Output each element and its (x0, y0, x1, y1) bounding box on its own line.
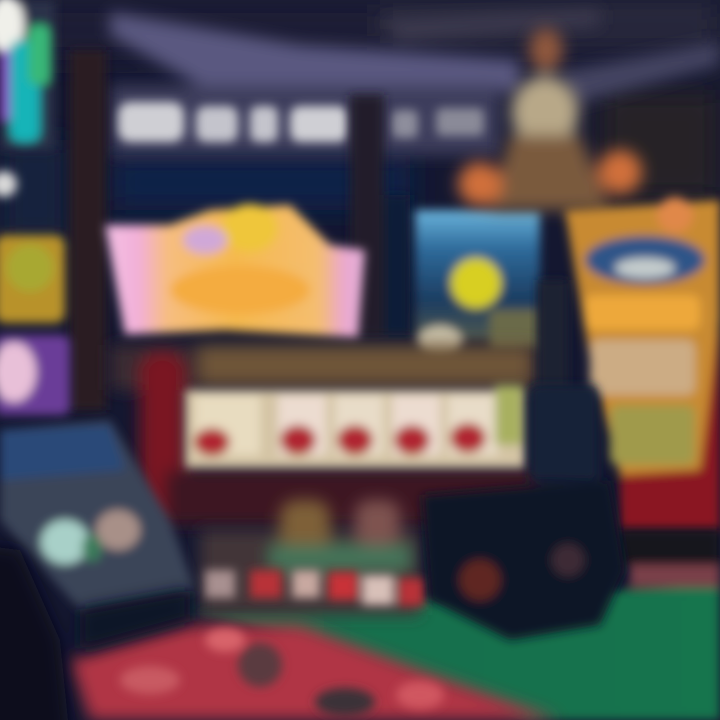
heading glow text (118, 102, 484, 142)
reels panel (185, 385, 525, 468)
ceiling bands (110, 10, 720, 155)
ceiling (0, 0, 720, 240)
pillars (70, 50, 410, 410)
blue screen (415, 210, 540, 358)
left neon panel (0, 0, 55, 197)
dark foreground corner (0, 545, 190, 720)
chip stacks (200, 500, 420, 615)
dark lower machine body (110, 345, 540, 525)
dark cube (422, 385, 625, 640)
main sign (105, 204, 365, 338)
roulette table (70, 625, 560, 720)
right machine (565, 197, 720, 530)
left console (0, 420, 195, 610)
felt table (190, 530, 720, 720)
dark post (538, 280, 568, 390)
statue and lamps (458, 28, 642, 210)
left small signs (0, 235, 70, 415)
